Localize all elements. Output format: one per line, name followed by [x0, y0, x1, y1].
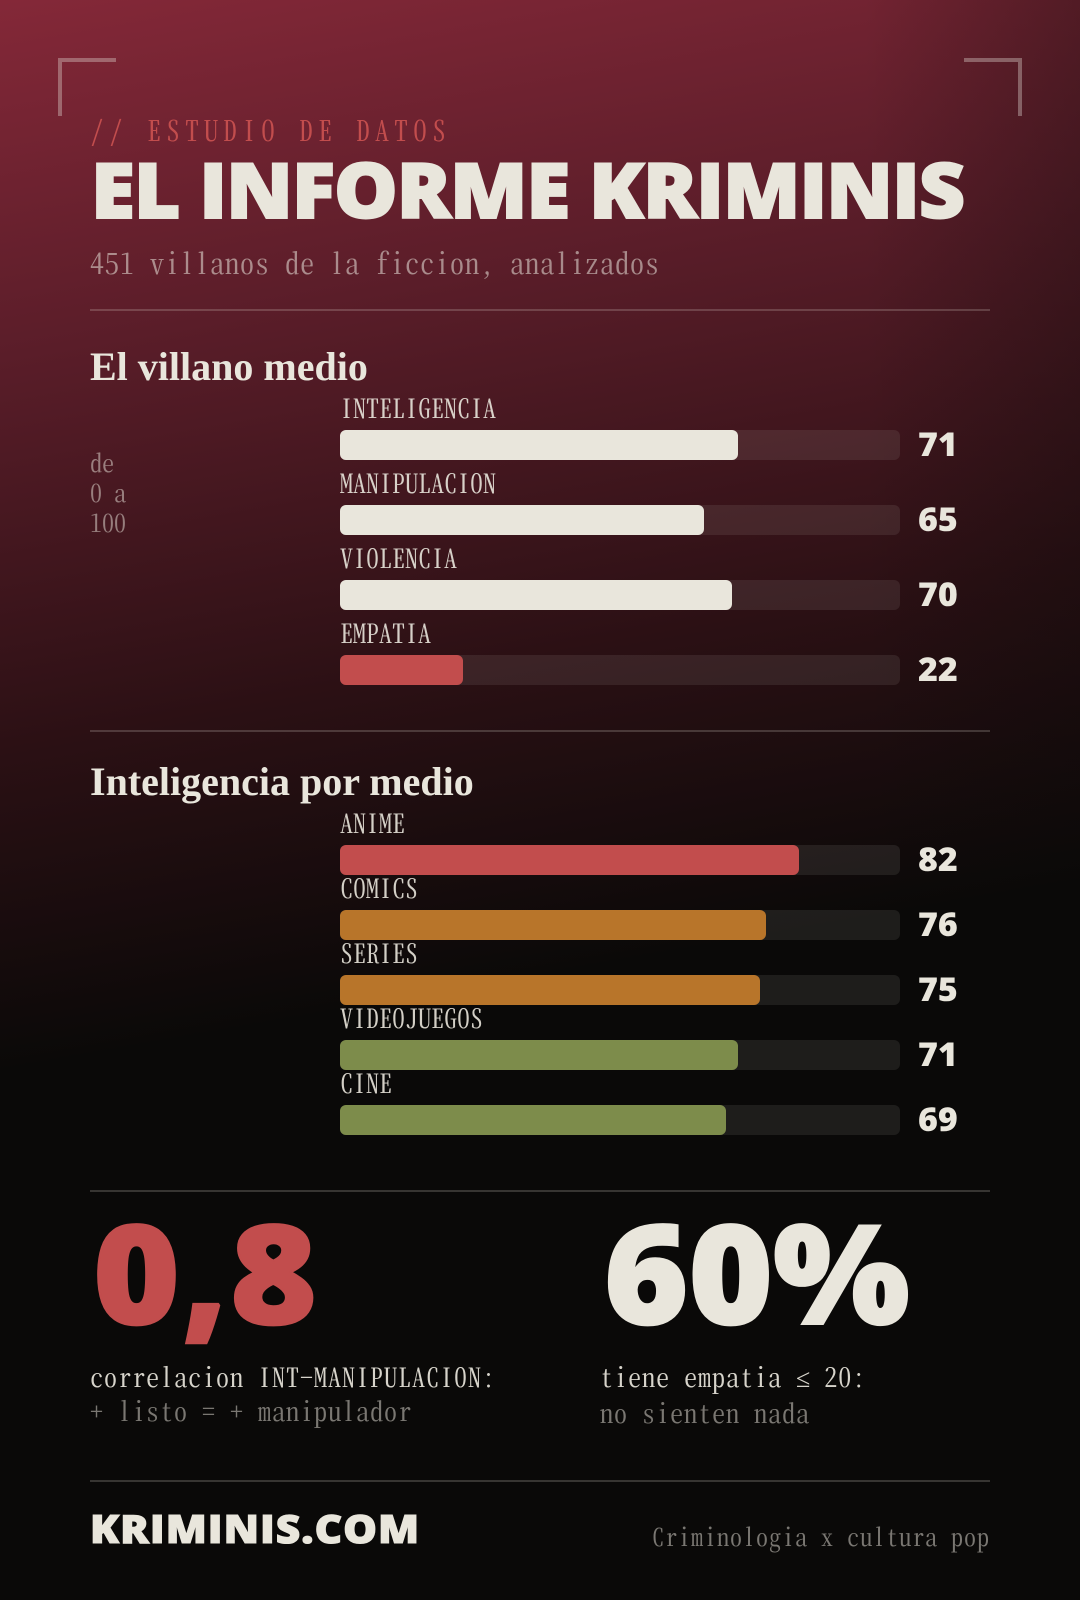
bar: violencia: VIOLENCIA	[340, 539, 457, 576]
stat: empatia	[600, 1177, 910, 1431]
bar: series: 75	[918, 966, 958, 1011]
caption: correlacion INT-MANIPULACION: + listo = + manipulador	[90, 1358, 496, 1429]
bar: anime	[340, 804, 958, 881]
title: EL INFORME KRIMINIS	[91, 138, 964, 241]
bar: cine	[340, 1064, 958, 1141]
bar: empatia: 22	[918, 646, 958, 691]
bar: cine: 69	[918, 1096, 958, 1141]
corner bracket: top left	[58, 58, 116, 116]
bar: anime: 82	[918, 836, 958, 881]
bar: anime: ANIME	[340, 804, 405, 841]
bar: inteligencia: INTELIGENCIA	[340, 389, 496, 426]
caption: tiene empatia ≤ 20: no sienten nada	[600, 1358, 866, 1431]
big number: 60%	[604, 1177, 910, 1365]
bar: inteligencia	[340, 389, 958, 466]
bar: comics: COMICS	[340, 869, 418, 906]
panel: inteligencia por medio bars	[340, 804, 958, 1141]
bar: manipulacion: 65	[918, 496, 958, 541]
big number: 0,8	[93, 1177, 319, 1365]
bar: comics	[340, 869, 958, 946]
subtitle: 451 villanos de la ficcion, analizados	[90, 243, 660, 283]
heading: Inteligencia por medio: Inteligencia por medio	[90, 759, 474, 804]
bar: videojuegos: 71	[918, 1031, 958, 1076]
heading: El villano medio: El villano medio	[90, 344, 368, 389]
footer brand: KRIMINIS.COM	[90, 1502, 420, 1555]
bar: empatia: EMPATIA	[340, 614, 431, 651]
stat: correlacion	[90, 1177, 496, 1429]
bar: empatia	[340, 614, 958, 691]
corner bracket: top right	[964, 58, 1022, 116]
bar: comics: 76	[918, 901, 958, 946]
bar: videojuegos: VIDEOJUEGOS	[340, 999, 483, 1036]
bar: inteligencia: 71	[918, 421, 958, 466]
bar: cine: CINE	[340, 1064, 392, 1101]
scale note: de 0 a 100	[90, 444, 126, 539]
bar: videojuegos	[340, 999, 958, 1076]
bar: series	[340, 934, 958, 1011]
panel: el villano medio bars	[340, 389, 958, 691]
bar: violencia	[340, 539, 958, 616]
eyebrow: // ESTUDIO DE DATOS	[90, 110, 451, 150]
bar: manipulacion: MANIPULACION	[340, 464, 496, 501]
bar: violencia: 70	[918, 571, 958, 616]
bar: series: SERIES	[340, 934, 418, 971]
footer tagline: Criminologia x cultura pop	[652, 1518, 990, 1553]
bar: manipulacion	[340, 464, 958, 541]
